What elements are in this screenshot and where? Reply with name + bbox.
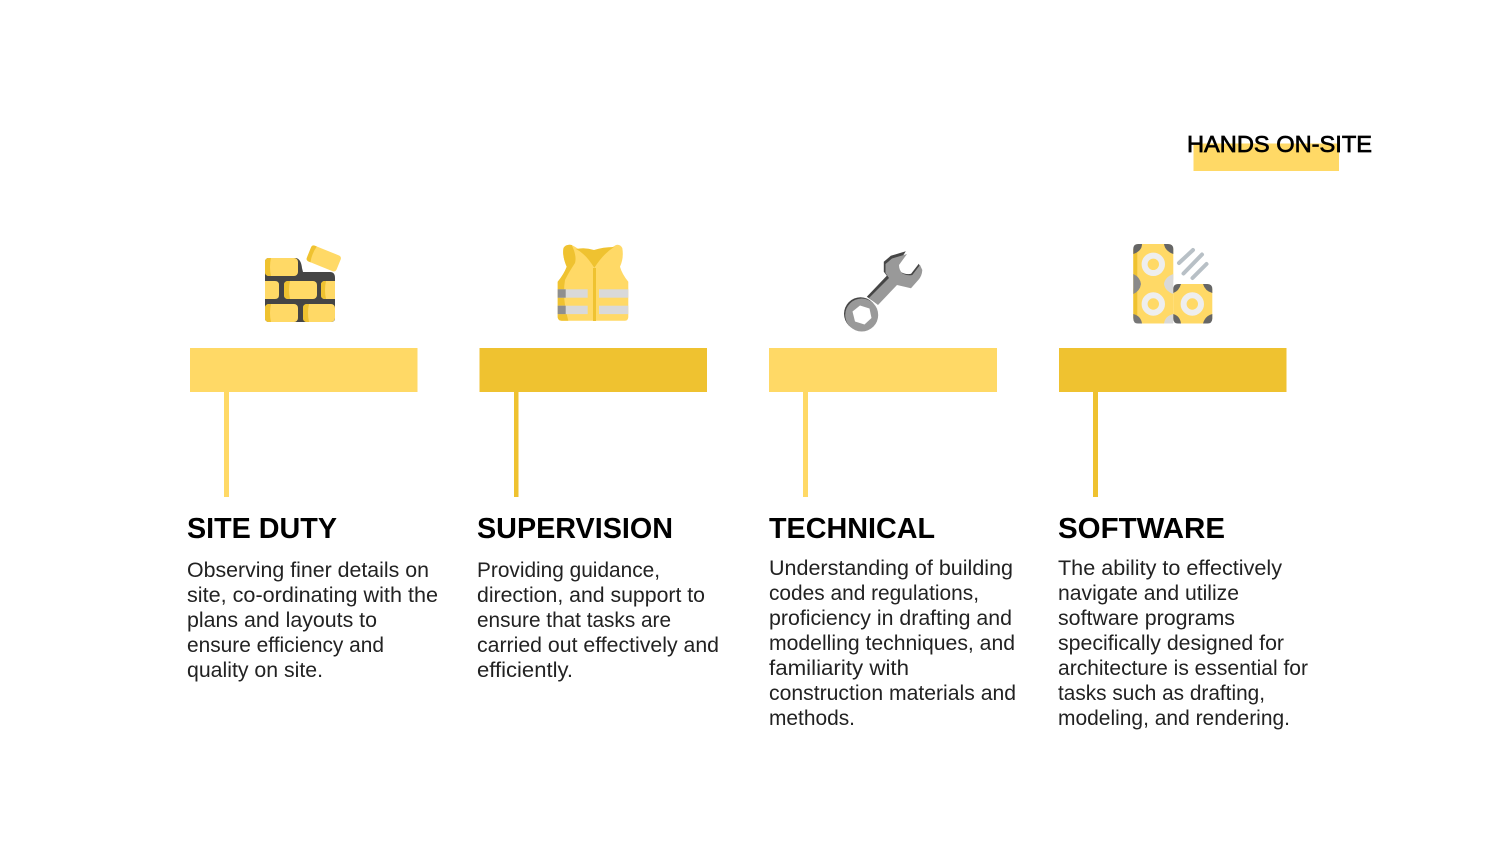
body text: site, co-ordinating with the	[187, 584, 438, 607]
heading: SUPERVISION	[477, 513, 673, 545]
body text: direction, and support to	[477, 584, 705, 607]
body text: codes and regulations,	[769, 582, 979, 605]
body text: specifically designed for	[1058, 632, 1284, 655]
title: hands on-site	[1187, 131, 1372, 171]
connector stem	[514, 392, 518, 497]
body text: tasks such as drafting,	[1058, 682, 1265, 705]
header bar	[769, 348, 997, 392]
icon: brick wall	[265, 245, 342, 322]
body text: architecture is essential for	[1058, 657, 1308, 680]
panel: supervision	[477, 245, 719, 682]
panel: software	[1058, 244, 1308, 730]
body text: plans and layouts to	[187, 609, 377, 632]
body text: modelling techniques, and	[769, 632, 1015, 655]
body text: ensure efficiency and	[187, 634, 384, 657]
body text: modeling, and rendering.	[1058, 707, 1290, 730]
body text: ensure that tasks are	[477, 609, 671, 632]
header bar	[1059, 348, 1286, 392]
panel: site duty	[187, 245, 438, 682]
connector stem	[1093, 392, 1098, 497]
icon: safety vest	[558, 245, 628, 321]
body text: proficiency in drafting and	[769, 607, 1012, 630]
heading: SITE DUTY	[187, 513, 337, 545]
body text: Providing guidance,	[477, 559, 660, 582]
header bar	[480, 348, 707, 392]
heading: TECHNICAL	[769, 513, 935, 545]
connector stem	[803, 392, 808, 497]
body text	[769, 557, 1016, 730]
body text	[187, 559, 438, 682]
body text: methods.	[769, 707, 855, 730]
header bar	[190, 348, 418, 392]
body text: construction materials and	[769, 682, 1016, 705]
body text: familiarity with	[769, 657, 909, 680]
title: hands on-site: HANDS ON-SITE	[1187, 131, 1372, 157]
body text	[1058, 557, 1308, 730]
connector stem	[224, 392, 229, 497]
body text: navigate and utilize	[1058, 582, 1239, 605]
body text	[477, 559, 719, 682]
body text: Understanding of building	[769, 557, 1013, 580]
body text: Observing finer details on	[187, 559, 429, 582]
body text: software programs	[1058, 607, 1235, 630]
icon: software blocks	[1133, 244, 1212, 324]
heading: SOFTWARE	[1058, 513, 1225, 545]
body text: The ability to effectively	[1058, 557, 1283, 580]
body text: carried out effectively and	[477, 634, 719, 657]
body text: efficiently.	[477, 659, 573, 682]
panel: technical	[769, 251, 1016, 730]
body text: quality on site.	[187, 659, 323, 682]
icon: wrench	[844, 251, 922, 332]
